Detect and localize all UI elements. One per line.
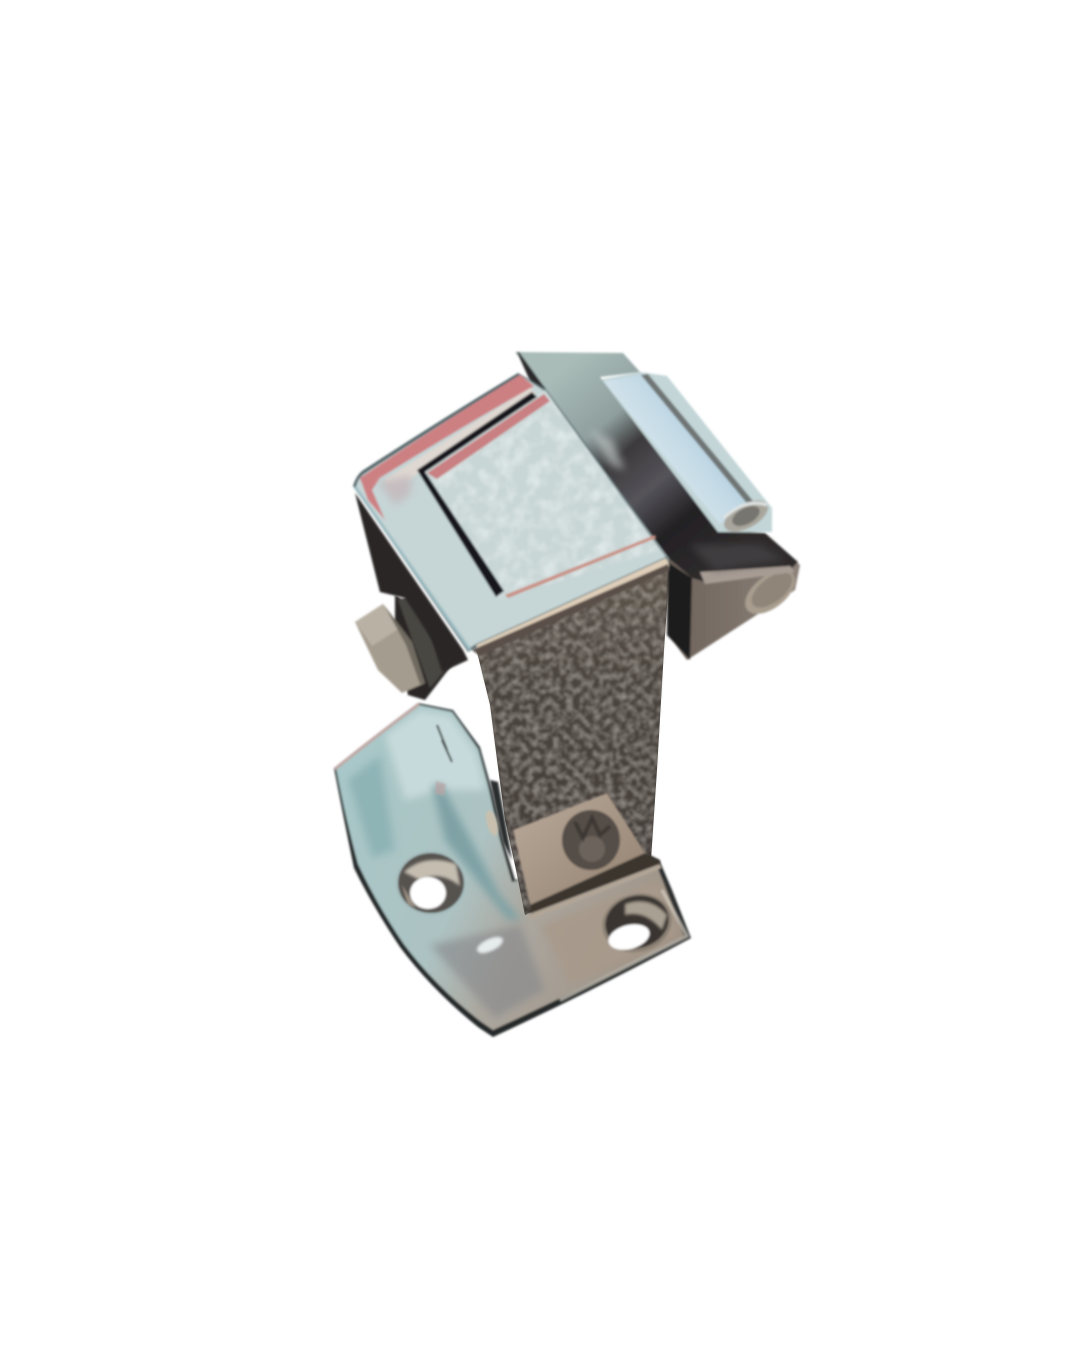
hinge strap and roller (515, 352, 803, 660)
top latch plate (353, 373, 670, 656)
lower hinge knuckle (667, 530, 803, 660)
lower mounting foot plate (334, 703, 691, 1037)
recessed screw head (562, 810, 620, 870)
right screw hole (596, 886, 678, 960)
hinge pin (737, 562, 803, 622)
hex nut and washers (355, 595, 452, 700)
main stem casting (477, 563, 670, 915)
left screw hole (395, 850, 467, 916)
roller sleeve (598, 372, 773, 538)
stem base block with screw (484, 780, 662, 920)
inner bolt glimpse (490, 780, 512, 860)
recessed sliding panel (420, 390, 660, 600)
dark left side wall (355, 493, 468, 672)
polished strap (515, 352, 798, 582)
left edge shine (355, 487, 470, 650)
red reflection along upper rim (360, 375, 534, 520)
foot plate highlights (335, 704, 687, 1018)
front chrome lip (476, 558, 670, 650)
